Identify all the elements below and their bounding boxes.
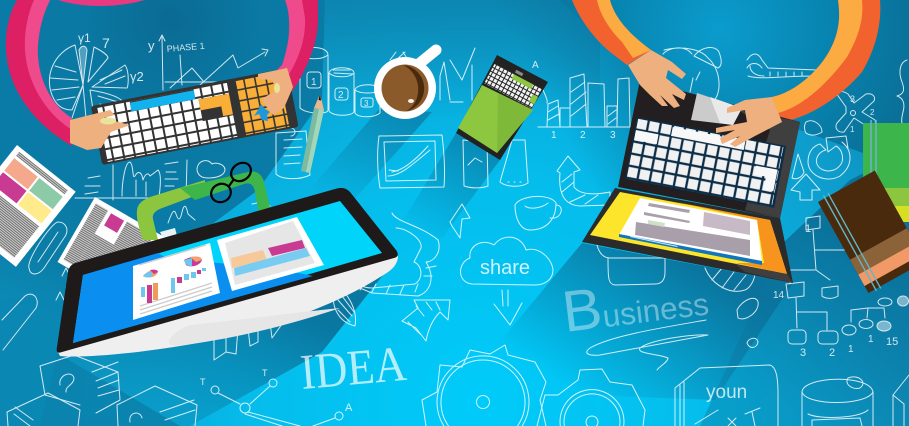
laptop screen frame [582, 188, 793, 283]
doodle: numbered cylinders: 2 [338, 90, 344, 101]
magenta block [0, 172, 26, 203]
doodle: bar chart with numbers [532, 60, 630, 141]
screen card bars [217, 217, 324, 291]
doodle: cross puzzle: 3 [850, 94, 855, 104]
doodle: share cloud [460, 237, 553, 325]
cup handle [420, 50, 436, 63]
phone keypad [484, 59, 545, 109]
doodle: cross puzzle [804, 91, 875, 135]
right sleeve [772, 0, 880, 122]
smartphone [456, 55, 548, 160]
keyboard body [91, 68, 299, 165]
book stripes [871, 120, 876, 178]
pink upper body piece [58, 0, 145, 6]
pie chart large [184, 256, 202, 266]
coffee [382, 64, 428, 112]
doodle: your text box: youn [706, 382, 747, 403]
doodle: milk carton [893, 375, 909, 426]
doodle: business word and underline: Business [559, 263, 711, 345]
doodle: network nodes: T [200, 377, 206, 387]
doodle: network nodes: A [345, 402, 353, 414]
pencil [301, 94, 324, 173]
doodle: gears [422, 345, 645, 426]
doodle: your text box [675, 365, 778, 426]
doodle: idea word: IDEA [298, 335, 409, 400]
doodle: coffee cup [515, 196, 561, 230]
doodle: fan chart: γ1 [78, 31, 91, 45]
document on screen [619, 198, 762, 265]
doodle: numbered cylinders: 1 [311, 77, 317, 88]
doodle: scribble ovals [737, 298, 758, 347]
brown notebook [817, 168, 909, 295]
doodle: note pad [276, 128, 310, 179]
doodle: org chart: 3 [800, 347, 806, 359]
document bottom lines [0, 188, 39, 258]
doodle: org chart: 14 [773, 290, 785, 301]
doodle: business word and underline [559, 263, 711, 370]
doodle: org chart [773, 216, 908, 359]
doodle: bar chart with numbers: 2 [580, 130, 586, 141]
doodle: direction arrows [791, 154, 820, 200]
laptop [582, 80, 800, 283]
doodle: cross puzzle: 2 [870, 108, 875, 117]
doodle: org chart: 15 [886, 336, 898, 348]
doodle: fan chart: γ2 [130, 69, 144, 84]
doodle: cross puzzle: 1 [850, 125, 855, 134]
doodle: curly brace [897, 60, 907, 123]
green block [29, 178, 63, 209]
yellow block [18, 192, 52, 223]
doodle: hatched arrow [402, 300, 450, 341]
blue push pin [254, 104, 270, 121]
green book [863, 120, 909, 222]
doodle: network nodes: T [262, 368, 268, 378]
doodle: bar chart with numbers: 3 [610, 130, 616, 141]
doodle: share cloud: share [480, 257, 530, 279]
cup body [374, 57, 436, 119]
screen card charts [133, 243, 220, 320]
notebook stripes [824, 193, 881, 291]
doodle: lower hatched chart [75, 160, 225, 223]
doodle: index flags [214, 313, 287, 360]
pink arm [6, 0, 318, 146]
hand on laptop left [628, 50, 686, 108]
doodle: circular arrow [808, 136, 850, 179]
doodle: fan chart [49, 31, 144, 118]
pie chart small [143, 270, 158, 278]
document left [0, 145, 76, 267]
doodle: bar chart with numbers: A [532, 60, 539, 71]
doodle: cubes [7, 355, 197, 426]
wide keys [630, 120, 782, 191]
tablet frame [57, 188, 398, 353]
tablet screen blue [73, 253, 313, 343]
doodle: line chart phase 1: y [148, 38, 155, 53]
phone screen shade [497, 93, 533, 153]
green handle [137, 171, 271, 243]
doodle: network nodes [200, 368, 353, 426]
thumb nail [100, 118, 116, 124]
doodle: small arrow [450, 204, 470, 238]
salmon block [4, 158, 38, 189]
doodle: hatched cloud [347, 213, 439, 296]
doodle: org chart: 1 [848, 344, 854, 355]
doodle: org chart: 2 [829, 347, 835, 359]
doodle: phones [463, 140, 528, 188]
doodle: line chart phase 1: PHASE 1 [166, 41, 205, 54]
doodle: fan chart: 7 [102, 35, 110, 51]
keyboard [91, 68, 299, 165]
doodle: cup and bowl under laptop [597, 245, 755, 291]
finger nail [274, 83, 280, 93]
doodle: can [802, 377, 873, 426]
doodle: org chart: 1 [868, 334, 874, 345]
document top lines [16, 152, 68, 194]
coffee cup [374, 50, 436, 119]
tablet stand [57, 256, 398, 357]
keyboard blue bar [130, 90, 195, 112]
doodle: numbered cylinders: 3 [364, 99, 369, 108]
keyboard orange keypad [236, 73, 289, 135]
bars [141, 268, 206, 303]
touch pad [691, 93, 742, 125]
doodle: line chart phase 1 [148, 35, 268, 90]
doodle: leaf [334, 288, 356, 326]
tablet [57, 188, 398, 357]
doodle: left of tablet arrow [56, 202, 270, 300]
doodle: bar chart with numbers: 1 [551, 130, 557, 141]
doodle: bent arrow [557, 156, 610, 206]
doodle: numbered cylinders [300, 48, 380, 117]
doodle: org chart: 1 [805, 223, 811, 235]
phone screen [458, 85, 533, 153]
magenta square [104, 213, 124, 233]
left sleeve [572, 0, 651, 65]
laptop screen yellow [590, 192, 787, 274]
laptop screen orange [676, 202, 787, 274]
document center [58, 197, 177, 309]
doodle: tablet sketch [378, 135, 445, 188]
doodle: alarm clock [663, 47, 721, 102]
doodle: wrench and ruler [747, 54, 817, 78]
orange arm [572, 0, 880, 122]
eyeglasses [208, 159, 254, 205]
phone body [456, 55, 548, 160]
pink right sleeve [270, 0, 318, 92]
hand on keyboard left [70, 110, 130, 150]
pink left sleeve [6, 0, 72, 146]
tablet screen cyan [73, 201, 382, 343]
doodle: paper clips [2, 222, 67, 350]
doodle: peak and dashed line chart [390, 48, 475, 102]
hand on laptop right [716, 97, 782, 147]
laptop keyboard [625, 117, 786, 208]
keyboard white keys [97, 83, 238, 162]
hand on keyboard right [258, 68, 293, 115]
laptop deck [618, 80, 800, 218]
keyboard orange key [199, 94, 233, 120]
